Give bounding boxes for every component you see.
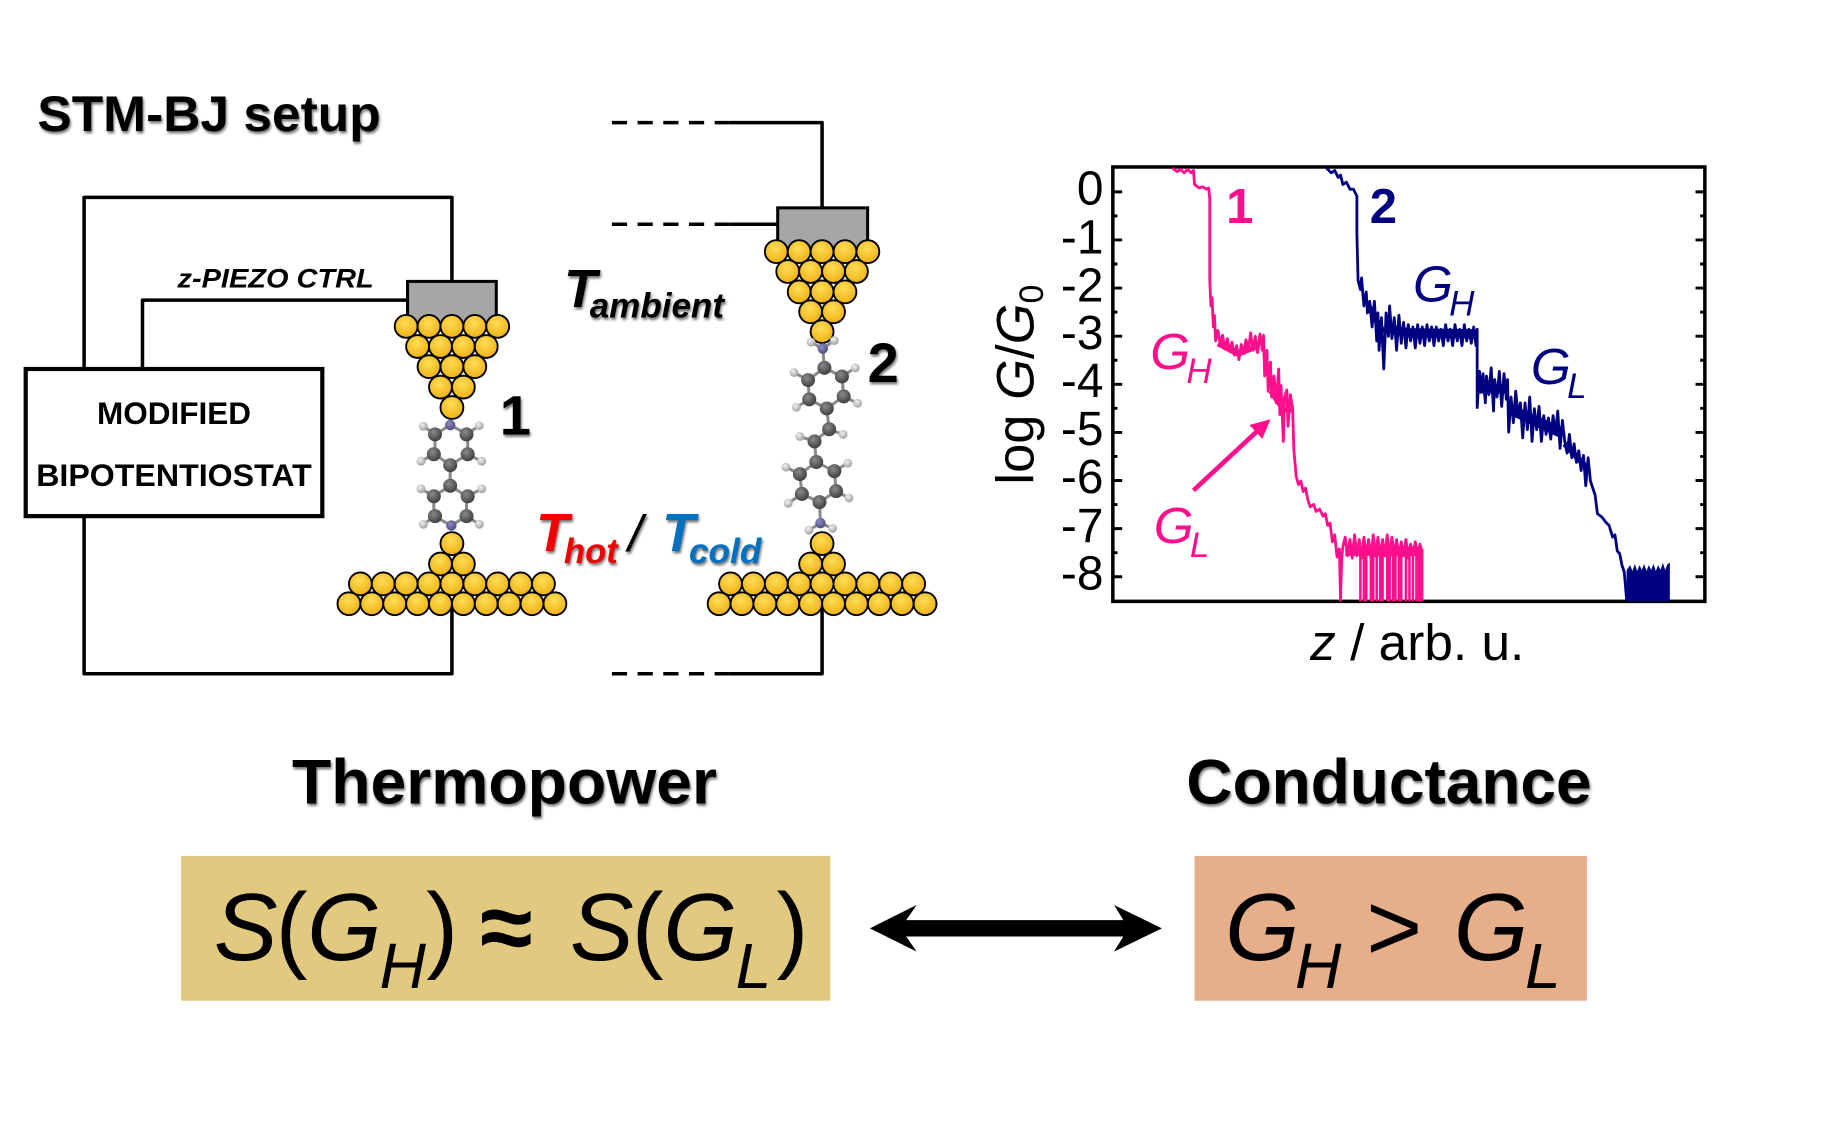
arrow: pink pointer to GL plateau <box>1193 419 1270 490</box>
y axis numbers: 0 <box>1077 162 1104 215</box>
gold substrate 2 <box>708 532 937 615</box>
panel: thermopower relation: H <box>380 930 427 1002</box>
panel: conductance relation <box>1195 856 1587 1002</box>
y axis numbers: -5 <box>1061 403 1104 456</box>
modified bipotentiostat box <box>26 369 322 516</box>
panel: thermopower relation: ) <box>777 874 808 981</box>
label: T hot / T cold: cold <box>689 532 762 571</box>
label: GL navy: G <box>1531 337 1571 395</box>
label: T ambient: T <box>564 259 601 319</box>
y axis numbers: -3 <box>1061 307 1104 360</box>
heading: Thermopower: Thermopower <box>292 747 717 817</box>
label: GL pink: L <box>1190 526 1209 565</box>
panel: conductance relation: H <box>1295 930 1342 1002</box>
label: molecule number 2: 2 <box>868 331 899 394</box>
wiring: junction 2 with dashed continuation <box>612 123 822 674</box>
panel: conductance relation: > <box>1366 874 1422 981</box>
modified bipotentiostat box: MODIFIED <box>97 395 251 431</box>
navy trace: molecule 2 <box>1327 168 1670 601</box>
wiring: junction 1 <box>84 197 452 674</box>
panel: thermopower relation: S <box>570 874 634 981</box>
plot frame and ticks <box>1113 167 1705 601</box>
x axis title: z / arb. u. <box>1309 613 1524 671</box>
piezo holder 1 <box>408 281 496 323</box>
label: T hot / T cold: / <box>625 504 647 562</box>
chart: conductance traces <box>986 162 1705 671</box>
y axis numbers: -8 <box>1061 548 1104 601</box>
curve label: 1: 1 <box>1226 180 1253 234</box>
y axis numbers: -1 <box>1061 211 1104 264</box>
label: z-piezo control: z-PIEZO CTRL <box>176 263 374 293</box>
panel: thermopower relation: S <box>214 874 278 981</box>
piezo holder 2 <box>778 208 868 250</box>
y axis title: log G/G <box>986 304 1045 485</box>
y axis numbers: -6 <box>1061 451 1104 504</box>
y axis numbers: -2 <box>1061 259 1104 312</box>
label: GH navy <box>1413 254 1475 323</box>
label: T ambient <box>564 259 725 326</box>
label: GL pink: G <box>1154 496 1194 554</box>
gold substrate 1 <box>337 532 566 615</box>
label: GH navy: G <box>1413 254 1453 312</box>
gold tip 1 <box>395 315 509 419</box>
title: STM-BJ setup: STM-BJ setup <box>37 86 381 142</box>
junction 1: tip holder, gold tip, molecule, gold substrate <box>337 281 566 615</box>
label: GH pink <box>1150 322 1212 391</box>
y axis numbers: -7 <box>1061 500 1104 553</box>
panel: conductance relation: G <box>1454 874 1528 981</box>
label: T hot / T cold <box>536 503 762 571</box>
panel: thermopower relation: ( <box>276 874 308 981</box>
panel: thermopower relation: G <box>307 874 382 981</box>
label: GH pink: H <box>1186 352 1212 391</box>
label: GL navy: L <box>1567 367 1587 406</box>
y axis numbers <box>1061 162 1104 601</box>
curve label: 2: 2 <box>1370 180 1397 234</box>
panel: conductance relation: G <box>1225 874 1299 981</box>
panel: thermopower relation: G <box>663 874 738 981</box>
panel: conductance relation: L <box>1525 930 1561 1002</box>
label: T hot / T cold: T <box>662 503 699 563</box>
label: GL pink <box>1154 496 1209 565</box>
label: molecule number 1: 1 <box>500 383 531 446</box>
panel: thermopower relation: ) <box>426 874 458 981</box>
gold tip 2 <box>765 240 879 343</box>
label: GL navy <box>1531 337 1587 406</box>
y axis numbers: -4 <box>1061 355 1104 408</box>
label: T hot / T cold: hot <box>564 532 619 571</box>
y axis title: 0 <box>1013 285 1051 304</box>
label: T ambient: ambient <box>590 287 725 326</box>
molecule 2: dipyridylethylene-type diamine <box>781 336 862 535</box>
heading: Conductance: Conductance <box>1186 747 1592 817</box>
label: GH pink: G <box>1150 322 1190 380</box>
modified bipotentiostat box: BIPOTENTIOSTAT <box>36 457 312 493</box>
label: T hot / T cold: T <box>536 503 573 563</box>
pink trace: molecule 1 <box>1172 168 1422 601</box>
panel: thermopower relation: ( <box>632 874 664 981</box>
panel: thermopower relation: ≈ <box>480 874 533 981</box>
panel: thermopower relation: L <box>736 930 771 1002</box>
molecule 1: bipyridine <box>417 420 486 531</box>
junction 2: tip holder, gold tip, molecule, gold substrate <box>708 208 937 615</box>
panel: thermopower relation <box>181 856 830 1002</box>
arrow: double-headed link <box>870 905 1162 952</box>
label: GH navy: H <box>1449 284 1475 323</box>
